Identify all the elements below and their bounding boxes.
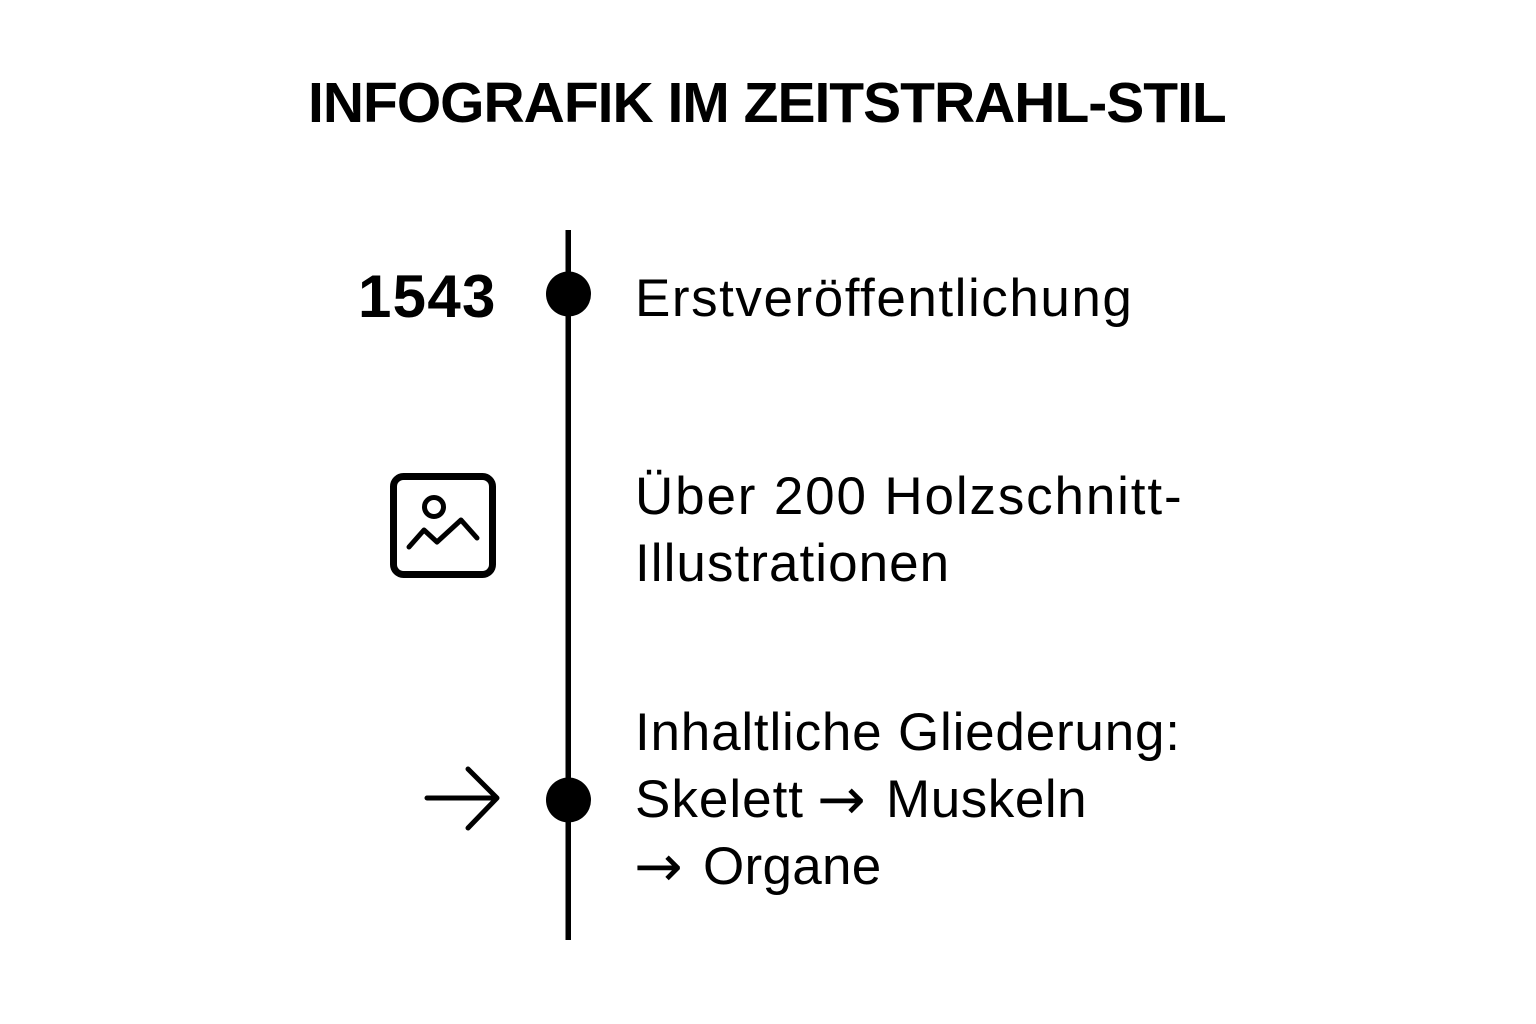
timeline dot 1543 <box>546 272 591 316</box>
text: content structure: Inhaltliche Gliederung: <box>635 703 1181 762</box>
text: first publication: Erstveröffentlichung <box>635 269 1133 328</box>
text: content structure: Skelett <box>635 770 804 829</box>
text: woodcut illustrations: Über 200 Holzschnitt- <box>635 467 1183 526</box>
icon: image <box>390 473 496 578</box>
timeline line <box>566 230 571 940</box>
year 1543: 1543 <box>358 263 497 330</box>
timeline dot structure <box>546 778 591 822</box>
text: content structure <box>634 703 1181 900</box>
text: content structure: Organe <box>703 837 882 896</box>
text: content structure: → <box>634 832 683 900</box>
title: INFOGRAFIK IM ZEITSTRAHL-STIL <box>308 71 1226 135</box>
text: content structure: → <box>817 765 866 833</box>
timeline <box>546 230 591 940</box>
text: woodcut illustrations <box>635 467 1183 593</box>
text: woodcut illustrations: Illustrationen <box>635 534 950 593</box>
text: content structure: Muskeln <box>886 770 1087 829</box>
icon: arrow <box>424 766 500 830</box>
